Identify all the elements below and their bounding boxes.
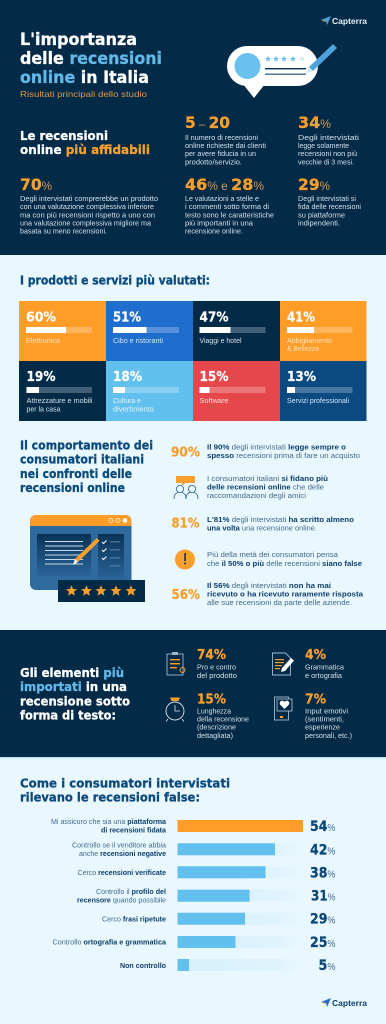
stat: 5-20: per avere fiducia in un — [185, 151, 256, 158]
bar row: 25%: Controllo ortografia e grammatica — [52, 940, 166, 946]
item: pros and cons — [167, 647, 237, 680]
stat: 34%: recensioni non più — [298, 151, 357, 158]
fact: friends: delle recensioni online che delle — [207, 484, 324, 492]
heading: important elements: importati in una — [20, 679, 127, 694]
bar row: 5%: Non controllo — [120, 963, 166, 970]
cell: Software: 15% — [200, 369, 229, 385]
cell: Cultura — [106, 361, 193, 421]
stat: 29% — [298, 175, 361, 228]
item: emotional input: Input emotivi — [305, 708, 348, 716]
fact: 56% — [172, 583, 363, 607]
cell: Software — [193, 361, 280, 421]
item: length: 15% — [197, 692, 226, 708]
stat: 5-20 — [185, 113, 266, 166]
cell: Cultura: Cultura e — [113, 398, 141, 405]
cell: Cibo e ristoranti: Cibo e ristoranti — [113, 338, 163, 345]
bar row: 25% — [52, 935, 336, 951]
stat: 70%: Degli intervistati comprerebbe un prodotto — [20, 196, 158, 203]
fact: 81%: una volta una recensione online. — [207, 526, 317, 532]
stat: 34%: Degli intervistati — [298, 135, 360, 142]
fact: 90%: 90% — [171, 444, 200, 460]
cell: Cultura: divertimento — [113, 406, 154, 414]
fact: friends: raccomandazioni degli amici — [207, 493, 306, 500]
heading: consumer behaviour: consumatori italiani — [20, 452, 144, 466]
cell: Cultura: 18% — [113, 369, 142, 385]
item: grammar: e ortografia — [305, 673, 342, 680]
stat: 29%: Degli intervistati si — [298, 196, 356, 203]
bar row: 5% — [120, 958, 336, 974]
icon: document and pencil — [272, 653, 294, 675]
stat: 34%: legge solamente — [298, 143, 349, 150]
logo: Capterra top: Capterra — [332, 16, 367, 26]
icon: warning — [175, 550, 195, 570]
heading: consumer behaviour: Il comportamento dei — [20, 438, 153, 452]
bar row: 31%: Controllo il profilo del — [96, 889, 166, 896]
item: pros and cons: Pro e contro — [197, 664, 236, 672]
heading: fake review detection: rilevano le recensioni false: — [20, 790, 200, 804]
bar row: 29%: 29% — [310, 912, 336, 928]
bar row: 38%: Cerco recensioni verificate — [78, 870, 166, 877]
fact: friends: I consumatori italiani si fidano più — [207, 476, 328, 483]
icon: stopwatch — [166, 698, 184, 722]
bar row: 29%: Cerco frasi ripetute — [102, 916, 166, 924]
bar row: 31%: 31% — [311, 889, 336, 905]
stat: 34%: 34% — [298, 113, 331, 132]
item: pros and cons: del prodotto — [197, 673, 237, 680]
bar chart: fake review detection — [51, 819, 336, 974]
heading: most reliable reviews — [20, 128, 150, 157]
cell: Attrezzature — [19, 361, 106, 421]
stat: 46% e 28%: 46% e 28% — [185, 175, 264, 194]
stat: 46% e 28%: recensione online. — [185, 228, 243, 236]
cell: Abbigliamento: Abbigliamento — [287, 338, 332, 345]
stat: 5-20: online richieste dai clienti — [185, 143, 266, 150]
item: length: dettagliata) — [197, 733, 233, 740]
stat: 70% — [20, 175, 158, 236]
cell: Viaggi e hotel: Viaggi e hotel — [200, 338, 242, 345]
stat: 70%: basata su meno recensioni. — [20, 228, 107, 236]
title — [20, 30, 162, 88]
icon: review bubble with pencil — [227, 44, 337, 98]
title: online in Italia — [20, 68, 149, 88]
item: grammar — [272, 647, 344, 680]
item: grammar: Grammatica — [305, 664, 344, 672]
heading: most reliable reviews: Le recensioni — [20, 128, 108, 143]
cell: Abbigliamento: 41% — [287, 310, 315, 326]
item: emotional input — [274, 692, 352, 740]
item: grammar: 4% — [305, 647, 326, 663]
item: emotional input: (sentimenti, — [305, 716, 344, 724]
bar row: 42%: anche recensioni negative — [79, 851, 166, 858]
fact: 56%: Il 56% degli intervistati non ha mai — [207, 583, 331, 590]
stat: 5-20: Il numero di recensioni — [185, 135, 258, 142]
icon: people — [174, 476, 198, 499]
title: L'importanza — [20, 30, 137, 50]
fact: 81% — [172, 516, 354, 532]
fact: friends — [174, 476, 328, 500]
cell: Cibo e ristoranti — [106, 301, 193, 361]
item: length: Lunghezza — [197, 708, 231, 716]
cell: Cibo e ristoranti: 51% — [113, 310, 141, 326]
cell: Software: Software — [200, 398, 229, 405]
heading: important elements: recensione sotto — [20, 694, 130, 708]
item: length: (descrizione — [197, 724, 236, 732]
cell: Attrezzature: Attrezzature e mobili — [26, 398, 93, 405]
heading: important elements: Gli elementi più — [20, 665, 124, 680]
fact: fake reviews: Più della metà dei consumatori pensa — [207, 552, 338, 559]
bar row: 54% — [51, 819, 336, 835]
item: emotional input: esperienze — [305, 724, 340, 732]
fact: 90%: Il 90% degli intervistati legge sempre o — [207, 444, 346, 452]
fact: 56%: alle sue recensioni da parte delle aziende. — [207, 600, 352, 607]
heading: fake review detection — [20, 776, 230, 804]
cell: Abbigliamento: & Bellezza — [287, 346, 319, 353]
heading: consumer behaviour — [20, 438, 153, 495]
bar row: 54%: 54% — [310, 819, 336, 835]
illustration: review window — [30, 515, 145, 602]
stat: 29%: 29% — [298, 175, 330, 194]
bar row: 5%: 5% — [318, 958, 336, 974]
fact: 90%: spesso recensioni prima di fare un acquisto — [207, 453, 360, 460]
icon: phone with heart — [274, 697, 292, 720]
heading: most reliable reviews: online più affidabili — [20, 142, 150, 157]
item: emotional input: personali, etc.) — [305, 733, 352, 740]
fact: fake reviews: che il 50% o più delle recensioni siano false — [207, 561, 362, 568]
fact: 56%: ricevuto o ha ricevuto raramente risposta — [207, 592, 363, 598]
item: pros and cons: 74% — [197, 647, 226, 663]
panel: text review elements — [0, 630, 386, 758]
heading: important elements: forma di testo: — [20, 708, 116, 722]
stat: 5-20: prodotto/servizio. — [185, 160, 242, 166]
heading: consumer behaviour: recensioni online — [20, 480, 125, 495]
item: length — [166, 692, 249, 740]
bar row: 42%: 42% — [310, 842, 336, 858]
panel: category grid — [19, 301, 366, 421]
stat: 46% e 28%: più importanti in una — [185, 220, 253, 228]
bar row: 54%: Mi assicuro che sia una piattaforma — [51, 819, 166, 826]
cell: Elettronica: Elettronica — [26, 338, 60, 345]
stat: 46% e 28%: Le valutazioni a stelle e — [185, 196, 259, 203]
stat: 29%: fida delle recensioni — [298, 204, 361, 211]
cell: Attrezzature: per la casa — [26, 406, 61, 414]
stat: 29%: su piattaforme — [298, 212, 345, 220]
fact: 56%: 56% — [172, 587, 200, 603]
stat: 70%: con una valutazione complessiva inferiore — [20, 204, 154, 211]
stat: 70%: ma con più recensioni rispetto a uno con — [20, 212, 155, 220]
stat: 46% e 28% — [185, 175, 274, 236]
logo: Capterra bottom: Capterra — [332, 998, 367, 1008]
cell: Servizi professionali: Servizi professionali — [287, 398, 349, 405]
heading: most rated products: I prodotti e servizi più valutati: — [20, 274, 210, 288]
bar row: 29% — [102, 912, 336, 928]
heading: important elements — [20, 665, 130, 722]
stat: 34% — [298, 113, 360, 166]
item: length: della recensione — [197, 716, 249, 724]
heading: fake review detection: Come i consumatori intervistati — [20, 776, 230, 790]
bar row: 54%: di recensioni fidata — [101, 828, 166, 834]
heading: consumer behaviour: nei confronti delle — [20, 466, 132, 481]
stat: 5-20: 5 – 20 — [185, 113, 230, 132]
stat: 46% e 28%: testo sono le caratteristiche — [185, 212, 274, 220]
bar row: 31% — [77, 889, 336, 905]
subtitle: Risultati principali dello studio — [20, 89, 147, 99]
bar row: 31%: recensore quando possibile — [77, 898, 166, 904]
cell: Servizi professionali: 13% — [287, 369, 316, 385]
item: emotional input: 7% — [305, 692, 326, 708]
stat: 70%: 70% — [20, 175, 52, 194]
cell: Viaggi e hotel — [193, 301, 280, 361]
bar row: 25%: 25% — [310, 935, 336, 951]
cell: Viaggi e hotel: 47% — [200, 310, 229, 326]
bar row: 38%: 38% — [310, 865, 336, 881]
stat: 70%: una valutazione complessiva migliore ma — [20, 220, 151, 228]
bar row: 38% — [78, 865, 336, 881]
fact: 81%: L'81% degli intervistati ha scritto almeno — [207, 517, 354, 524]
cell: Servizi professionali — [280, 361, 366, 421]
fact: 90% — [171, 444, 360, 460]
stat: 46% e 28%: i commenti sotto forma di — [185, 204, 269, 211]
stat: 34%: vecchie di 3 mesi. — [298, 160, 354, 166]
cell: Elettronica: 60% — [26, 310, 56, 326]
cell: Abbigliamento — [280, 301, 366, 361]
cell: Elettronica — [19, 301, 106, 361]
fact: 81%: 81% — [172, 516, 200, 532]
icon: clipboard — [167, 652, 185, 675]
panel: header — [0, 0, 386, 255]
stat: 29%: indipendenti. — [298, 220, 340, 228]
fact: fake reviews — [175, 550, 362, 570]
bar row: 42% — [72, 842, 336, 858]
bar row: 42%: Controllo se il venditore abbia — [72, 842, 166, 850]
cell: Attrezzature: 19% — [26, 369, 56, 385]
title: delle recensioni — [20, 49, 162, 69]
